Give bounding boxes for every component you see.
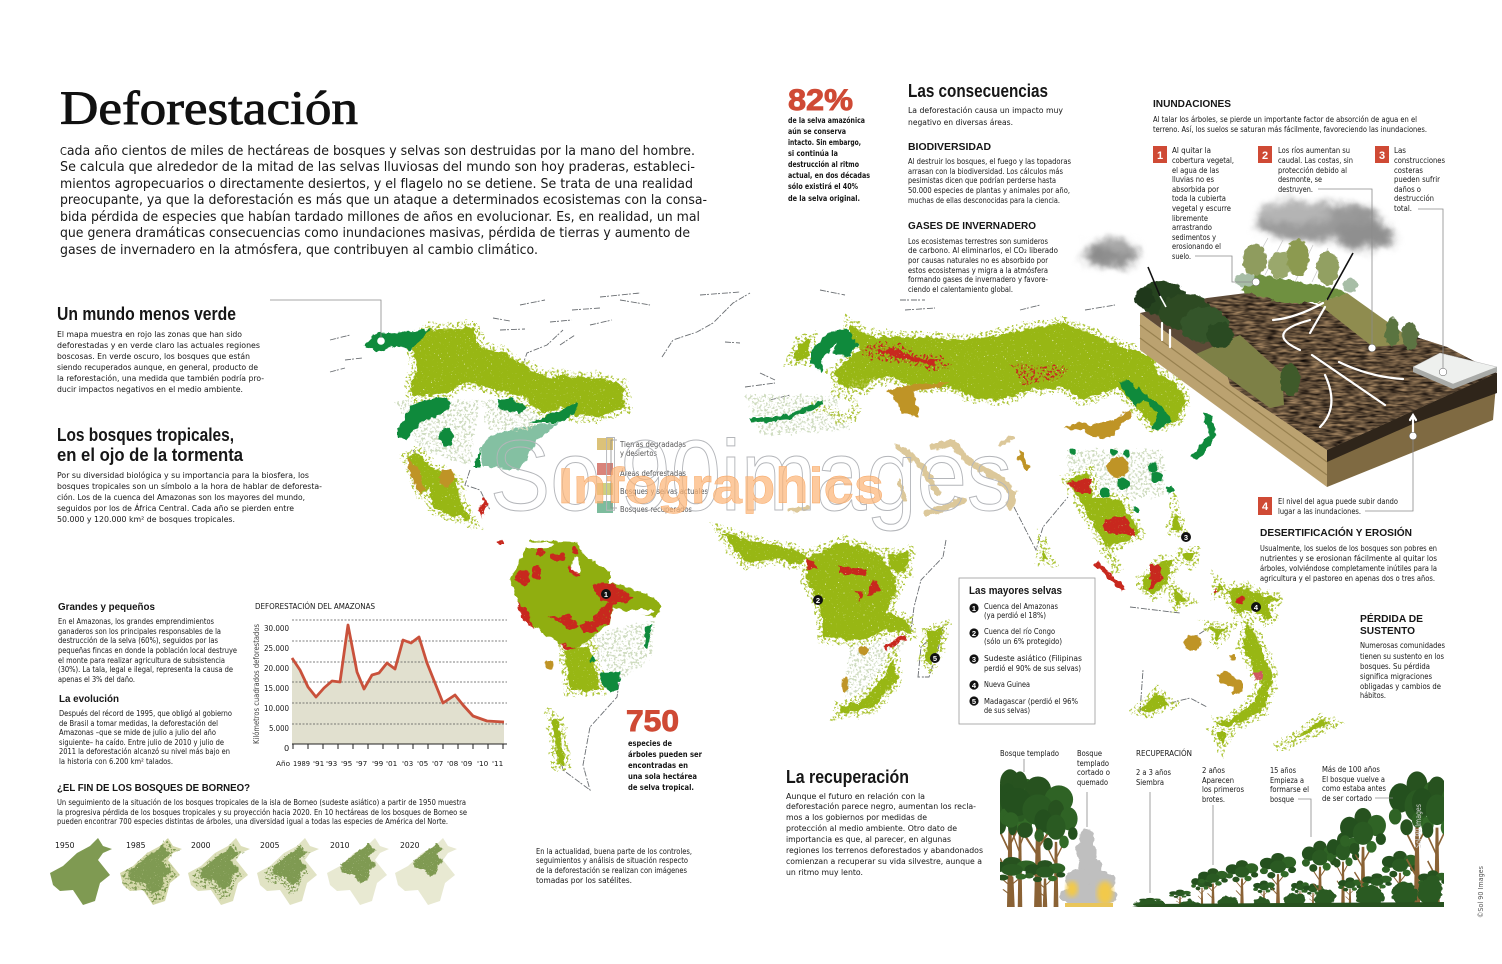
line chart: Amazon deforestation: '07 [432,759,444,768]
callout: 82%: 82% [788,84,853,117]
line chart: Amazon deforestation: DEFORESTACIÓN DEL AMAZONAS [255,602,375,611]
section: Grandes y pequeños: En el Amazonas, los grandes emprendimientos [58,617,214,626]
line chart: Amazon deforestation [252,602,507,768]
forest leader lines [1024,759,1393,893]
intro text: Cada año cientos de miles de hectáreas de bosques y selvas son destruidas por la mano del hombre. [60,143,695,159]
section: La evolución: La evolución [59,693,119,705]
step 4 [1258,497,1398,516]
forest labels: quemado [1077,778,1108,787]
line chart: Amazon deforestation: 25.000 [264,643,289,653]
map legend: Bosques y selvas actuales [620,487,708,496]
step 3: 3 [1379,150,1385,162]
step 2: caudal. Las costas, sin [1278,156,1353,165]
section: Grandes y pequeños: el monte para realizar agricultura de subsistencia [58,656,225,665]
callout: 750 species [626,705,702,792]
section: Un mundo menos verde: siendo recuperados aunque, en general, producto de [57,363,258,372]
intro text: gases de invernadero en la atmósfera, que contribuyen al cambio climático. [60,242,538,258]
step 3: costeras [1394,166,1423,175]
section: Grandes y pequeños: destrucción de la selva (60%), seguidos por las [58,636,218,645]
section: Los bosques tropicales: Los bosques tropicales, [57,425,234,445]
left rain cloud [1082,238,1138,267]
box: largest jungles: 1 [972,604,976,613]
Borneo map 2010 [327,838,389,905]
section: Grandes y pequeños: apenas el 3% del daño. [58,675,135,684]
callout: 82%: si continúa la [788,149,838,158]
Borneo map 1985 [120,838,182,905]
diagram: flood terrain block [1082,189,1497,511]
watermark: Infographics [558,458,884,514]
section: Inundaciones [1153,98,1445,516]
intro text: preocupante, ya que la deforestación es más que un ataque a determinados ecosistemas con la consa- [60,192,707,208]
forest labels: bosque [1270,795,1294,804]
map: forest marker 3 [1181,532,1191,542]
forest recovery illustration: Sol 90 Images [1414,804,1423,848]
step 3: total. [1394,204,1412,213]
line chart: Amazon deforestation: '10 [477,759,489,768]
regrowing forest [1132,771,1462,908]
section: La recuperación [786,767,983,877]
box: largest jungles: Sudeste asiático (Filipinas [984,654,1082,663]
box: largest jungles: Cuenca del río Congo [984,627,1055,636]
step 1: Al quitar la [1172,146,1211,155]
step 4: lugar a las inundaciones. [1278,507,1361,516]
section: Desertificación y erosión: árboles, volviéndose completamente inútiles para la [1260,564,1437,573]
section: La recuperación: La recuperación [786,767,909,787]
map: current forests and jungles, light olive green [407,323,1330,765]
map: recovered forest, pale green [480,423,560,470]
line chart: Amazon deforestation: 15.000 [264,683,289,693]
box: largest jungles: 2 [972,629,976,638]
step 4: El nivel del agua puede subir dando [1278,497,1398,506]
section: Un mundo menos verde: la reforestación, una medida que también podría pro- [57,374,264,383]
step 3: daños o [1394,185,1421,194]
soil top [1140,290,1497,450]
map legend: y desiertos [620,449,657,458]
box: largest jungles: 4 [972,681,977,690]
dark trees [1135,281,1418,396]
intro text: Se calcula que alrededor de la mitad de las selvas lluviosas del mundo son hoy praderas, estableci- [60,160,695,175]
forest labels: como estaba antes [1322,784,1386,793]
forest labels: El bosque vuelve a [1322,775,1385,784]
line chart: Amazon deforestation: 30.000 [264,623,289,633]
step 2: protección debido al [1278,166,1347,175]
map: forest marker 4: 4 [1254,603,1259,612]
callout: 82%: aún se conserva [788,127,846,136]
forest labels: formarse el [1270,785,1309,794]
map: forest marker 5 [930,653,940,663]
intro text [60,143,707,258]
section: Las consecuencias: negativo en diversas áreas. [908,118,1013,127]
note on satellites: En la actualidad, buena parte de los controles, [536,847,692,856]
line chart: Amazon deforestation: 1989 [293,759,310,768]
section: Las consecuencias: Las consecuencias [908,81,1048,101]
callout: 750 species: de selva tropical. [628,783,694,792]
section: Inundaciones: INUNDACIONES [1153,98,1231,110]
step 2: 2 [1262,150,1268,162]
step 1: el agua de las [1172,166,1219,175]
map legend: Tierras degradadas [619,440,686,449]
forest recovery illustration [983,749,1462,908]
world map of forests [330,290,1330,790]
leader lines [1195,189,1443,511]
section: La evolución: la historia con 6.200 km² talados. [59,757,173,766]
step 2: desmonte, se [1278,175,1322,184]
section: Los bosques tropicales: 50.000 y 120.000 km² de bosques tropicales. [57,515,235,524]
step 2: Los ríos aumentan su [1278,146,1350,155]
section: Desertificación y erosión: agricultura y el pastoreo en apenas dos o tres años. [1260,574,1435,583]
temperate forest [1000,769,1078,907]
step 2 [1258,146,1353,194]
box: largest jungles: Las mayores selvas [969,585,1062,597]
map: forest marker 4 [1251,602,1261,612]
section: La evolución: Amazonas –que se mide de julio a julio del año [59,728,216,737]
note on satellites [536,847,692,885]
forest labels: Bosque templado [1000,749,1059,758]
line chart: Amazon deforestation: '11 [492,759,503,768]
callout: 82%: destrucción al ritmo [788,159,859,169]
section: Pérdida de sustento: tienen su sustento en los [1360,652,1444,661]
section: Las consecuencias: BIODIVERSIDAD [908,141,991,153]
callout: 82%: intacto. Sin embargo, [788,138,861,147]
step 1: vegetal y escurre [1172,204,1231,213]
line chart: Amazon deforestation: '05 [417,759,428,768]
section: Borneo forests: pueden encontrar 700 especies distintas de árboles, una diversidad igual a todas las especies de América del Norte. [57,817,448,826]
line chart: Amazon deforestation: 0 [284,743,289,753]
section: Pérdida de sustento: significa migraciones [1360,672,1432,681]
step 3: Las [1394,146,1406,155]
water arrows [1162,303,1416,435]
section: La recuperación: deforestación parece negro, aumentan los recla- [786,802,976,811]
section: Borneo forests [50,782,467,905]
step 1 [1153,146,1234,261]
title: Deforestación [60,82,358,135]
map: forest marker 1 [601,589,611,599]
section: Grandes y pequeños: Grandes y pequeños [58,601,155,613]
note on satellites: tomadas por los satélites. [536,876,632,885]
map legend: Áreas deforestadas [620,469,686,478]
section: Un mundo menos verde: deforestadas y en verde claro las actuales regiones [57,341,260,350]
note on satellites: de la deforestación se realizan con imágenes [536,866,687,875]
callout: 82%: actual, en dos décadas [788,170,870,180]
section: La recuperación: comienzan a recuperar su vida silvestre, aunque a [786,857,982,866]
map: Amazon rainforest [510,540,662,650]
box: largest jungles: 3 [972,655,976,664]
map: forest marker 1: 1 [604,590,608,599]
line chart: Amazon deforestation: 20.000 [264,663,289,673]
step 3: pueden sufrir [1394,175,1441,184]
box: largest jungles: 5 [972,697,976,706]
forest labels: templado [1077,759,1109,768]
Borneo map 1950: 1950 [55,841,75,850]
map: forest marker 3: 3 [1184,533,1188,542]
map: fringe of forests [407,323,1330,765]
callout: 750 species: 750 [626,705,679,738]
intro text: bida pérdida de especies que habían tardado millones de años en evolucionar. Es, en realidad, un mal [60,209,700,225]
callout: 82%: sólo existirá el 40% [788,181,858,191]
bushes on hill [1235,239,1357,292]
section: Las consecuencias: Los ecosistemas terrestres son sumideros [908,237,1048,246]
map: coastlines and arctic islands [330,290,1210,790]
section: Los bosques tropicales [57,425,322,524]
section: La recuperación: regiones los terrenos deforestados y abandonados [786,846,983,855]
intro text: mientos agropecuarios o directamente desiertos, y el flagelo no se detiene. Se trata de una realidad [60,177,693,192]
section: Las consecuencias: La deforestación causa un impacto muy [908,106,1063,115]
box: largest jungles: (sólo un 6% protegido) [984,637,1062,646]
credit: ©Sol 90 Images [1477,866,1485,918]
section: Grandes y pequeños: pequeñas fincas en donde la población local destruye [58,646,237,655]
section: Pérdida de sustento: bosques. Su pérdida [1360,662,1430,671]
callout: 750 species: árboles pueden ser [628,750,702,759]
step 1: lluvias no es [1172,175,1214,184]
forest labels: 2 años [1202,766,1225,775]
section: Desertificación y erosión: DESERTIFICACIÓN Y EROSIÓN [1260,526,1412,539]
callout: 750 species: una sola hectárea [628,772,697,781]
section: Grandes y pequeños: ganaderos son los principales responsables de la [58,627,221,636]
map: forest clearings [526,542,654,615]
main rain cloud [1256,201,1395,249]
diagram markers [1252,278,1447,440]
forest labels: Empieza a [1270,776,1304,785]
forest labels: los primeros [1202,785,1244,794]
section: Las consecuencias: de carbono. Al eliminarlos, el CO₂ liberado [908,246,1058,255]
Borneo map 2000: 2000 [191,841,211,850]
section: Los bosques tropicales: Por su diversidad biológica y su importancia para la biosfera, los [57,471,309,480]
section: Las consecuencias: GASES DE INVERNADERO [908,220,1036,232]
callout: 750 species: especies de [628,739,672,748]
box: largest jungles [959,578,1095,724]
section: Pérdida de sustento: hábitos. [1360,691,1386,700]
Borneo map 1950 [50,838,112,905]
line chart: Amazon deforestation: Año [276,759,291,768]
section: La evolución [59,693,232,766]
map: deforested areas, red [478,349,1264,680]
forest labels: de ser cortado [1322,794,1372,803]
line chart: Amazon deforestation: '03 [402,759,414,768]
fire and smoke [1059,829,1117,907]
section: Los bosques tropicales: ción. Los de la cuenca del Amazonas son los mayores del mundo, [57,493,305,502]
map: pale degraded desert lands [790,438,1013,513]
step 1: absorbida por [1172,185,1220,194]
section: La recuperación: protección al medio ambiente. Otro dato de [786,824,957,833]
step 3 [1375,146,1445,213]
section: Grandes y pequeños [58,601,237,684]
map: tan degraded lands [407,383,1243,695]
section: Un mundo menos verde: boscosas. En verde oscuro, los bosques que están [57,352,250,361]
forest labels: 15 años [1270,766,1296,775]
section: Desertificación y erosión: nutrientes y se erosionan fácilmente al quitar los [1260,554,1437,563]
coastal building [1413,353,1497,389]
box: largest jungles: perdió el 90% de sus selvas) [984,664,1081,673]
section: La evolución: de Brasil a tomar medidas, la deforestación del [59,719,218,728]
section: La recuperación: mos a los gobiernos por medidas de [786,813,927,822]
section: La evolución: Después del récord de 1995, que obligó al gobierno [59,709,232,718]
section: La recuperación: un ritmo muy lento. [786,868,863,877]
step 1: sedimentos y [1172,233,1216,242]
step 1: toda la cubierta [1172,194,1226,203]
map: recovered forests, dark green [363,328,1216,693]
note on satellites: seguimientos y análisis de situación respecto [536,856,688,865]
forest labels: cortado o [1077,768,1110,777]
grass fields [1196,335,1284,408]
section: Las consecuencias: estos ecosistemas y migra a la atmósfera [908,266,1048,275]
Borneo map 2005: 2005 [260,841,280,850]
section: Los bosques tropicales: seguidos por los de África Central. Cada año se pierden entre [57,504,294,513]
section: Pérdida de sustento [1360,612,1445,700]
step 3: construcciones [1394,156,1445,165]
step 1: libremente [1172,214,1208,223]
line chart: Amazon deforestation: Kilómetros cuadrados deforestados [252,624,261,744]
section: Los bosques tropicales: en el ojo de la tormenta [57,445,244,465]
forest labels: brotes. [1202,795,1225,804]
map: location marker Alaska [377,337,385,345]
section: Borneo forests: la progresiva pérdida de los bosques tropicales y su proyección hacia 2020. En 10 hectáreas de los bosques de Borneo se [57,808,467,817]
section: Un mundo menos verde [57,300,381,394]
section: Pérdida de sustento: SUSTENTO [1360,625,1415,637]
forest labels: Aparecen [1202,776,1234,785]
line chart: Amazon deforestation: '95 [341,759,352,768]
section: Los bosques tropicales: bosques tropicales son un símbolo a la hora de hablar de deforesta- [57,482,322,491]
left wall of block [1140,313,1327,487]
section: Las consecuencias: pesimistas dicen que podrían perderse hasta [908,176,1056,185]
section: Un mundo menos verde: Un mundo menos verde [57,304,236,324]
section: La recuperación: importancia es que, al parecer, en algunas [786,835,951,844]
map legend: Bosques recuperados [620,505,692,514]
Borneo map 2005 [257,838,319,905]
step 1: arrastrando [1172,223,1212,232]
callout: 82% [788,84,870,203]
step 1: erosionando el [1172,242,1221,251]
forest labels: RECUPERACIÓN [1136,749,1192,758]
rain arrows [1148,253,1353,307]
section: Desertificación y erosión: Usualmente, los suelos de los bosques son pobres en [1260,544,1437,553]
map legend [597,438,708,514]
section: Las consecuencias: arrasan con la biodiversidad. Los cálculos más [908,167,1063,176]
box: largest jungles: Cuenca del Amazonas [984,602,1058,611]
line chart: Amazon deforestation: '01 [386,759,397,768]
step 3: destrucción [1394,194,1434,203]
right wall of block [1327,373,1497,487]
section: Inundaciones: terreno. Así, los suelos se saturan más fácilmente, favoreciendo las inundaciones. [1153,125,1427,134]
map: forest marker 2 [813,595,823,605]
Borneo map 2000 [188,838,250,905]
forest labels: Siembra [1136,778,1164,787]
map: forest marker 5: 5 [933,654,937,663]
section: Las consecuencias: Al destruir los bosques, el fuego y las topadoras [908,157,1071,166]
section: Borneo forests: ¿EL FIN DE LOS BOSQUES DE BORNEO? [57,782,250,794]
step 1: cobertura vegetal, [1172,156,1234,165]
section: Pérdida de sustento: Numerosas comunidades [1360,641,1445,650]
callout: 750 species: encontradas en [628,761,688,770]
line chart: Amazon deforestation: '91 [313,759,324,768]
line chart: Amazon deforestation: '09 [461,759,473,768]
box: largest jungles: de sus selvas) [984,706,1030,715]
section: Las consecuencias: muchas de ellas desconocidas para la ciencia. [908,196,1060,205]
section: Las consecuencias: por causas naturales no es absorbido por [908,256,1049,265]
intro text: que genera dramáticas consecuencias como inundaciones masivas, pérdida de tierras y aumento de [60,225,690,241]
line chart: Amazon deforestation: 5.000 [269,723,289,733]
section: Desertificación y erosión [1260,526,1437,583]
step 1: suelo. [1172,252,1191,261]
box: largest jungles: Nueva Guinea [984,680,1030,689]
step 2: destruyen. [1278,185,1313,194]
line chart: Amazon deforestation: '97 [356,759,368,768]
map: sparse deforestation in Russia [860,343,1070,385]
section: La evolución: siguiente– ha caído. Entre julio de 2010 y julio de [59,738,224,747]
Borneo map 1985: 1985 [126,841,146,850]
line chart: Amazon deforestation: '93 [326,759,338,768]
callout: 82%: de la selva amazónica [788,115,865,125]
section: La recuperación: Aunque el futuro en relación con la [786,792,925,801]
box: largest jungles: Madagascar (perdió el 96% [984,697,1078,706]
section: Pérdida de sustento: obligadas y cambios de [1360,682,1441,691]
line chart: Amazon deforestation: '99 [372,759,384,768]
section: Un mundo menos verde: ducir impactos negativos en el medio ambiente. [57,385,243,394]
section: Un mundo menos verde: El mapa muestra en rojo las zonas que han sido [57,330,242,339]
section: Grandes y pequeños: (30%). La tala, legal e ilegal, representa la causa de [58,665,233,674]
section: Las consecuencias [908,81,1071,294]
callout: 82%: de la selva original. [788,194,860,203]
map: light arcs of western Russia [810,380,893,420]
section: Inundaciones: Al talar los árboles, se pierde un importante factor de absorción de agua en el [1153,115,1417,124]
map: sparse pale vegetation [395,395,1165,700]
step 4: 4 [1262,501,1269,513]
section: Borneo forests: Un seguimiento de la situación de los bosques tropicales de la isla de Borneo (sudeste asiático) a partir de 1950 muestra [57,798,466,807]
box: largest jungles: (ya perdió el 18%) [984,611,1046,620]
forest labels: Bosque [1077,749,1102,758]
Borneo map 2010: 2010 [330,841,350,850]
forest labels: Más de 100 años [1322,765,1380,774]
Borneo map 2020 [395,838,457,905]
Borneo map 2020: 2020 [400,841,420,850]
forest labels [1000,749,1386,804]
section: Las consecuencias: ciendo el calentamiento global. [908,285,1013,294]
step 1: 1 [1157,150,1163,162]
section: Las consecuencias: 50.000 especies de plantas y animales por año, [908,186,1070,195]
line chart: Amazon deforestation: '08 [447,759,459,768]
watermark: Sol90images [490,420,1012,532]
section: Pérdida de sustento: PÉRDIDA DE [1360,612,1423,625]
section: La evolución: 2011 la deforestación alcanzó su nivel más bajo en [59,747,230,756]
forest labels: 2 a 3 años [1136,768,1171,777]
map: forest marker 2: 2 [816,596,820,605]
section: Las consecuencias: formando gases de invernadero y favore- [908,275,1048,284]
line chart: Amazon deforestation: 10.000 [264,703,289,713]
